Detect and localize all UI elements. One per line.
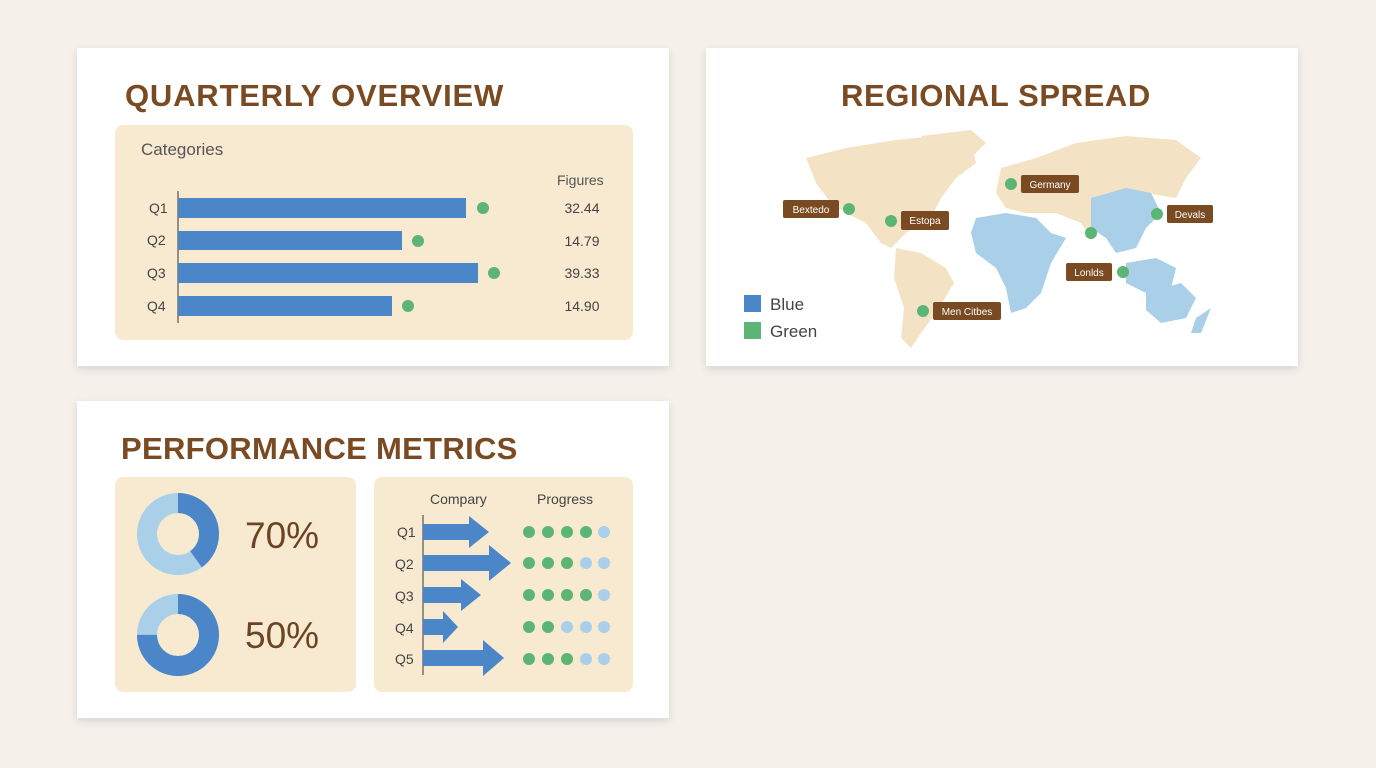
panel: progress arrows: Q4 (395, 620, 414, 636)
bar chart (141, 140, 604, 323)
panel: progress arrows: Q2 (395, 556, 414, 572)
world map: Blue (770, 295, 804, 314)
heading: quarterly overview: QUARTERLY OVERVIEW (125, 78, 504, 113)
panel: progress arrows (374, 477, 633, 692)
bar chart: Categories (141, 140, 223, 159)
world map (744, 130, 1213, 348)
panel: bar chart (115, 125, 633, 340)
panel: progress arrows: Compary (430, 491, 487, 507)
bar chart: 14.79 (564, 233, 600, 249)
panel: progress arrows: Progress (537, 491, 593, 507)
panel: progress arrows: Q1 (397, 524, 416, 540)
bar chart: Figures (557, 172, 604, 188)
panel: progress arrows: Q3 (395, 588, 414, 604)
world map: Lonlds (1074, 268, 1104, 279)
panel: donuts: 70% (245, 515, 319, 556)
world map: Germany (1029, 180, 1071, 191)
world map: Green (770, 322, 817, 341)
panel: donuts (115, 477, 356, 692)
bar chart: Q2 (147, 232, 166, 248)
bar chart: Q3 (147, 265, 166, 281)
bar chart: 14.90 (564, 298, 600, 314)
card: regional spread (706, 48, 1298, 366)
heading: performance metrics: PERFORMANCE METRICS (121, 431, 518, 466)
world map: Bextedo (793, 205, 830, 216)
bar chart: Q1 (149, 200, 168, 216)
world map: Devals (1175, 210, 1205, 221)
panel: progress arrows: Q5 (395, 651, 414, 667)
bar chart: 39.33 (564, 265, 600, 281)
panel: donuts: 50% (245, 615, 319, 656)
world map: Estopa (909, 216, 941, 227)
card: performance metrics (77, 401, 669, 718)
card: quarterly overview (77, 48, 669, 366)
bar chart: Q4 (147, 298, 166, 314)
bar chart: 32.44 (564, 200, 600, 216)
world map: Men Citbes (942, 307, 992, 318)
heading: regional spread: REGIONAL SPREAD (841, 78, 1151, 113)
